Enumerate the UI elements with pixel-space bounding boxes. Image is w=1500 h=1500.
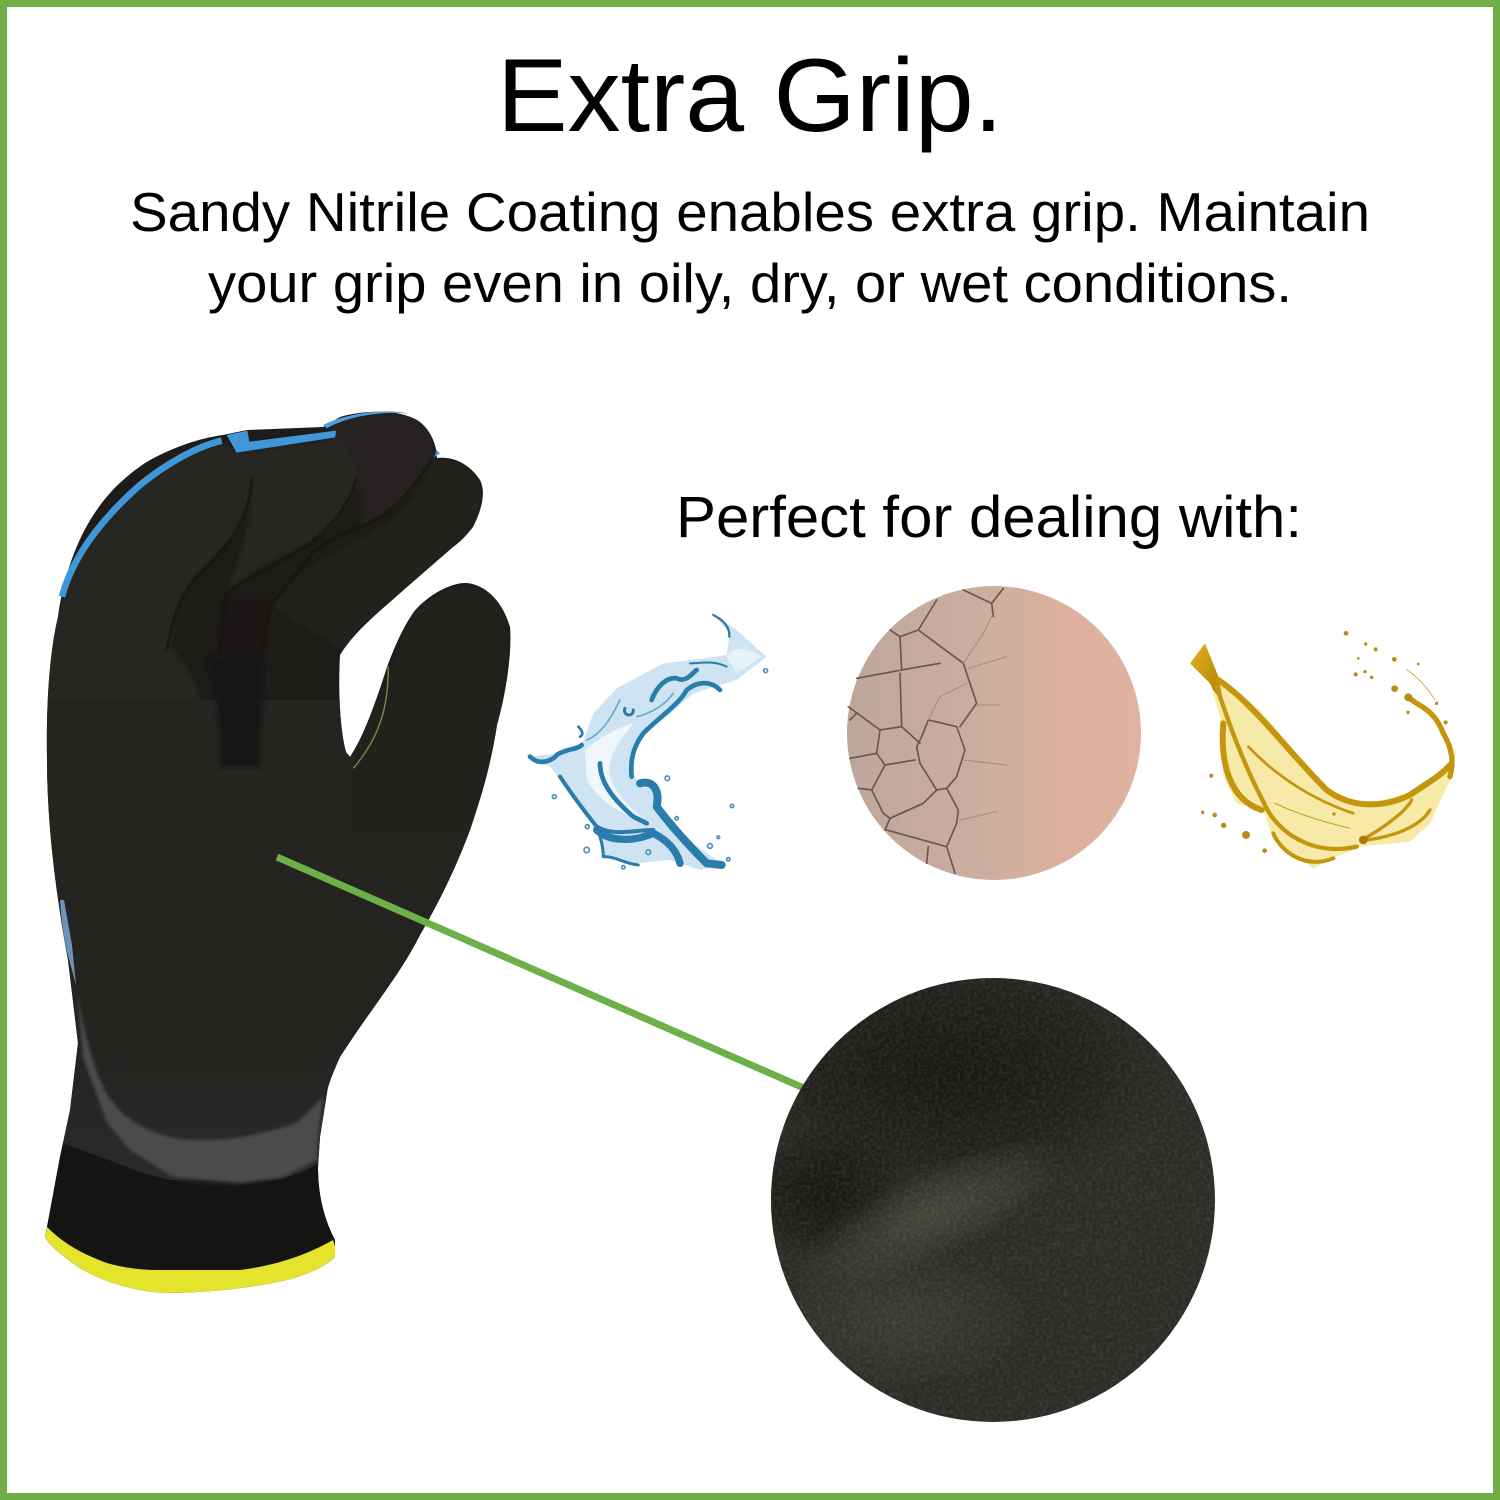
oil splash — [1190, 631, 1457, 868]
glove photo illustration — [30, 411, 520, 1300]
lighter ridge — [825, 1155, 1035, 1268]
water droplets — [552, 669, 768, 869]
grey dipped band — [77, 993, 323, 1183]
description text: Sandy Nitrile Coating enables extra grip. Maintain — [130, 181, 1370, 243]
title: Extra Grip. — [497, 38, 1003, 154]
fingers — [33, 413, 508, 833]
glove shading — [30, 413, 520, 1300]
green callout line — [277, 857, 806, 1089]
oil knot — [1359, 836, 1368, 844]
dark shadow areas — [782, 978, 1138, 1164]
finger gaps — [167, 460, 432, 653]
oil droplets — [1201, 631, 1448, 853]
skin cracks — [848, 588, 1007, 873]
water splash — [530, 615, 768, 870]
sandy nitrile close-up circle — [771, 978, 1215, 1422]
subheading: Perfect for dealing with: — [676, 485, 1302, 550]
knit cuff — [40, 1140, 340, 1270]
thumb seam — [353, 667, 388, 768]
glove blue side strip — [60, 900, 76, 985]
oil body — [1190, 643, 1457, 868]
sandy grain texture — [771, 978, 1215, 1422]
dry cracked skin circle — [847, 586, 1141, 880]
splash highlight — [585, 723, 647, 822]
splash dark streaks — [530, 615, 729, 865]
glove silhouette — [45, 412, 510, 1293]
description text: your grip even in oily, dry, or wet conditions. — [208, 252, 1292, 314]
oil twisted tip — [1190, 643, 1223, 703]
oil gold edges — [1217, 669, 1452, 862]
palm tone — [30, 700, 520, 1180]
yellow cuff trim — [45, 1227, 335, 1293]
description text — [130, 181, 1370, 314]
splash body — [530, 615, 767, 870]
glove blue back trim — [62, 411, 440, 597]
